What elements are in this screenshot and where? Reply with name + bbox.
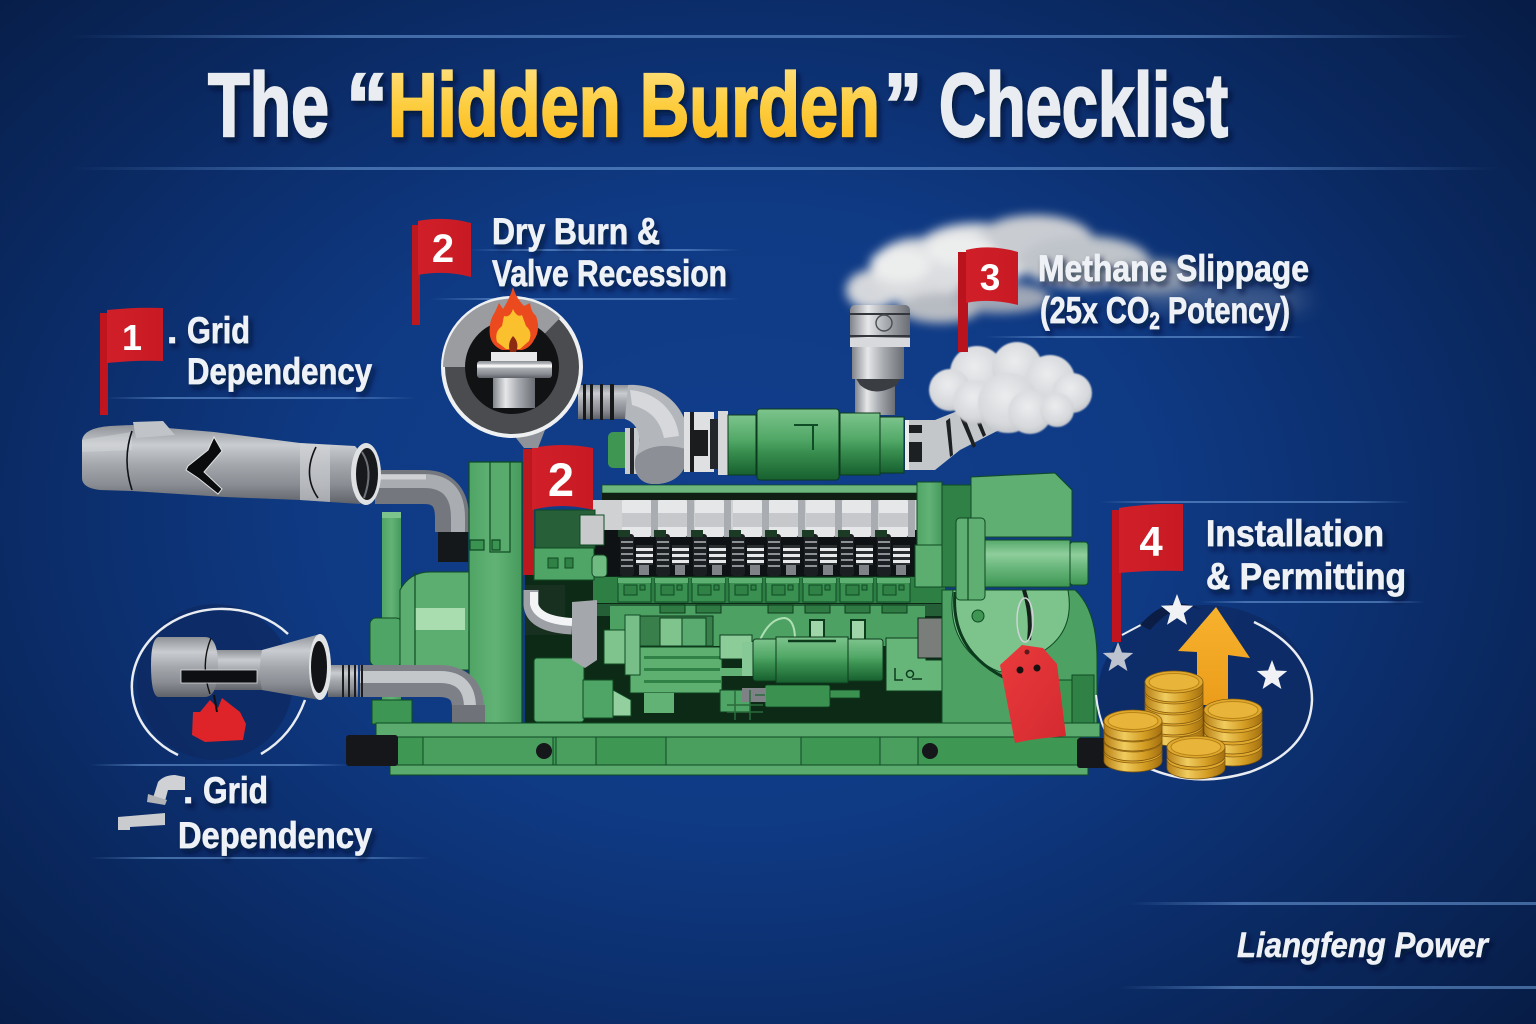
flag 3 [958, 247, 1018, 352]
cracked pipe [82, 421, 381, 505]
narrow post [382, 512, 401, 722]
smoke plume [846, 215, 1198, 323]
bottom block left [372, 700, 412, 724]
manifold [593, 577, 945, 603]
panel: installation and permitting [1096, 504, 1406, 781]
cylinder bank [593, 500, 923, 576]
label 4: . [183, 770, 193, 811]
panel: flame valve [412, 211, 727, 448]
brand name: Liangfeng Power [1237, 926, 1490, 965]
title: ” [884, 56, 922, 156]
label 1: Dependency [187, 351, 372, 392]
base feet [346, 735, 1111, 768]
lower right pipe [360, 677, 485, 724]
outlet pipe [905, 404, 1003, 470]
title: The [208, 56, 329, 156]
flag 3: 3 [980, 257, 1000, 298]
end plate [469, 462, 522, 724]
circle badge [443, 298, 581, 436]
hose [1024, 590, 1030, 640]
label 4: Dependency [178, 815, 372, 856]
label 5: Installation [1206, 513, 1384, 554]
label 1 [167, 310, 372, 392]
funnel device [151, 634, 331, 700]
circle [132, 604, 305, 760]
flag 1: 1 [122, 317, 142, 358]
label 5 [1206, 513, 1406, 597]
label 2: Valve Recession [492, 253, 727, 294]
flag 2: 2 [432, 227, 454, 271]
circle [1096, 604, 1312, 781]
label 3: methane: 2 [1149, 308, 1160, 335]
base frame [376, 723, 1100, 775]
exhaust stack [850, 305, 910, 415]
label 3: methane: Methane Slippage [1038, 248, 1309, 289]
lower pipe ribs [328, 665, 363, 697]
label 1: Grid [187, 310, 250, 351]
coin stacks [1104, 671, 1262, 779]
flag 1 [100, 308, 163, 415]
generator drum [400, 572, 470, 670]
label 4 [178, 770, 372, 856]
flange [684, 411, 728, 475]
flag 2 on engine: 2 [548, 453, 574, 506]
green duct [728, 409, 904, 480]
flag 4 [1112, 504, 1183, 642]
elbow pipe from circle [578, 384, 689, 484]
label 2 [492, 211, 727, 294]
engine [346, 462, 1111, 775]
label 3: methane: Potency) [1160, 290, 1290, 331]
flag 2 [412, 219, 471, 325]
flag 4: 4 [1139, 518, 1163, 565]
title: “ [346, 56, 388, 156]
flag 2 on engine [523, 445, 593, 575]
white elbow and hex [525, 585, 597, 668]
panel: grid dependency 1 [82, 308, 381, 505]
title: Hidden Burden [388, 56, 880, 156]
title [208, 56, 1228, 156]
price tag [1000, 598, 1066, 743]
label 5: & Permitting [1206, 556, 1406, 597]
label 2: Dry Burn & [492, 211, 660, 252]
rear dark backing [525, 570, 945, 725]
smoke plume fade [1125, 275, 1310, 312]
red hand [192, 695, 246, 742]
label 3: methane [1038, 248, 1309, 335]
left block over cylinders [534, 510, 607, 580]
upper left pipe [375, 477, 468, 562]
icon: rising arrow [1178, 607, 1250, 705]
lower block body [594, 604, 944, 720]
top rail [602, 485, 922, 500]
label 4: Grid [203, 770, 268, 811]
neck and right cylinder [915, 473, 1097, 723]
lower left block [534, 615, 640, 722]
left bump [370, 618, 402, 666]
stars [1103, 594, 1287, 689]
label 1: . [167, 310, 177, 351]
exhaust duct and stack [578, 305, 1003, 484]
cloud [929, 342, 1092, 434]
label 3: methane: (25x CO [1040, 290, 1180, 331]
panel: grid dependency 2 [118, 604, 372, 856]
title: Checklist [939, 56, 1228, 156]
duct icon [118, 775, 185, 830]
icon: flame [490, 287, 538, 352]
lower bracket [512, 430, 545, 448]
